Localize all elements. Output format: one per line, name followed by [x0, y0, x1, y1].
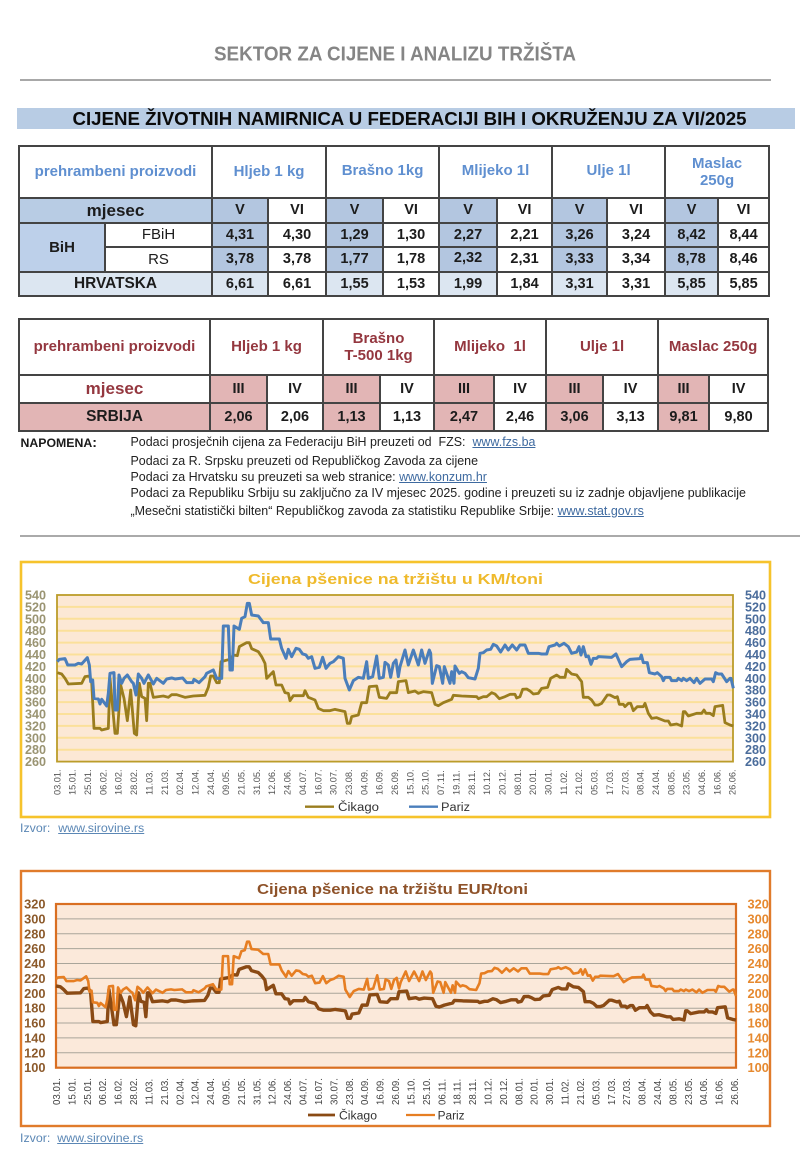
notes text: Podaci prosječnih cijena za Federaciju BiH preuzeti od FZS: www.fzs.ba	[130, 435, 535, 449]
x axis date labels: 15.10.	[405, 769, 415, 795]
x axis date labels: 11.03.	[144, 770, 154, 795]
x axis date labels: 06.02.	[98, 1078, 109, 1105]
x axis date labels	[52, 1078, 741, 1105]
left axis labels: 480	[25, 624, 46, 638]
left axis labels: 280	[25, 743, 46, 757]
table header row: products: Ulje 1l	[586, 162, 631, 179]
table header row: products	[20, 330, 757, 430]
x axis date labels: 11.03.	[144, 1079, 156, 1105]
x axis date labels: 24.04.	[206, 1078, 217, 1105]
table row: Serbia prices: 3,06	[560, 409, 589, 425]
notes text: Podaci za R. Srpsku preuzeti od Republičkog Zavoda za cijene	[130, 454, 478, 468]
right axis labels: 120	[748, 1045, 769, 1060]
left axis labels: 380	[25, 684, 46, 698]
table header row: products: Mlijeko 1l	[462, 162, 529, 179]
x axis date labels: 23.08.	[345, 1078, 356, 1105]
x axis date labels: 27.03.	[622, 1078, 633, 1105]
left axis labels: 140	[24, 1030, 46, 1045]
table row: months	[20, 199, 750, 222]
table row: RS prices: RS	[148, 251, 169, 268]
left axis labels: 520	[25, 600, 46, 614]
table row: months: IV	[732, 381, 745, 397]
table row: months: V	[235, 202, 245, 218]
table row: Croatia prices: 1,53	[397, 276, 425, 292]
x axis date labels: 10.12.	[482, 769, 492, 795]
table: BiH and Croatia food prices	[18, 145, 770, 297]
table row: FBiH prices: 8,42	[677, 227, 706, 243]
x axis date labels: 12.06.	[268, 1078, 279, 1105]
x axis date labels: 16.02.	[114, 1078, 125, 1105]
x axis date labels: 24.06.	[283, 769, 293, 795]
x axis date labels: 30.01.	[544, 769, 554, 795]
table header row: products	[20, 155, 758, 295]
table row: months: IV	[288, 381, 302, 397]
x axis date labels: 15.01.	[67, 1078, 78, 1105]
x axis date labels: 21.02.	[574, 769, 584, 795]
x axis date labels: 26.06.	[730, 1078, 741, 1105]
table row: Serbia prices: 2,06	[224, 409, 253, 425]
x axis date labels: 20.01.	[528, 769, 538, 795]
x axis date labels: 12.04.	[190, 769, 200, 795]
left axis labels: 260	[24, 941, 46, 956]
x axis date labels: 27.03.	[620, 769, 630, 795]
left axis labels: 300	[25, 731, 46, 745]
x axis date labels: 16.07.	[314, 1078, 325, 1105]
right axis labels: 100	[748, 1060, 769, 1075]
x axis date labels: 08.01.	[514, 1078, 525, 1105]
table row: months: IV	[513, 381, 527, 397]
table row: months: mjesec	[86, 379, 143, 398]
x axis date labels: 06.11.	[437, 1079, 448, 1105]
table row: Serbia prices	[20, 404, 753, 430]
x axis date labels: 23.08.	[344, 769, 354, 795]
x axis date labels: 23.05.	[682, 769, 692, 795]
x axis date labels: 28.02.	[129, 1078, 140, 1105]
line: Chicago	[56, 967, 736, 1026]
legend	[308, 1109, 465, 1122]
left axis labels: 260	[25, 755, 46, 769]
table header row: products: T-500 1kg	[344, 347, 413, 364]
banner: main title: CIJENE ŽIVOTNIH NAMIRNICA U FEDERACIJI BIH I OKRUŽENJU ZA VI/2025	[72, 108, 746, 129]
left axis labels: 420	[25, 660, 46, 674]
right axis labels: 520	[745, 600, 766, 614]
table row: months: VI	[737, 202, 750, 218]
left axis labels: 180	[24, 1001, 46, 1016]
x axis date labels: 25.10.	[422, 1078, 433, 1105]
table row: months: IV	[624, 381, 637, 397]
right axis labels: 240	[748, 956, 769, 971]
left axis labels: 320	[25, 719, 46, 733]
table row: RS prices: 8,46	[729, 251, 758, 267]
x axis date labels: 21.05.	[237, 1078, 248, 1105]
x axis date labels: 08.05.	[668, 1078, 679, 1105]
right axis labels: 360	[745, 696, 766, 710]
x axis date labels: 25.01.	[83, 769, 93, 795]
notes text: Podaci za Republiku Srbiju su zaključno za IV mjesec 2025. godine i preuzeti su iz zadnje objavljene publikacije	[130, 486, 746, 500]
x axis date labels: 05.03.	[590, 769, 600, 795]
table header row: products: Hljeb 1 kg	[234, 163, 304, 180]
x axis date labels: 08.01.	[513, 769, 523, 795]
x axis date labels: 25.01.	[83, 1078, 94, 1105]
x axis date labels: 03.01.	[52, 1078, 63, 1105]
table row: Croatia prices	[20, 273, 758, 295]
x axis date labels: 11.02.	[559, 770, 569, 795]
source: chart 1: Izvor: www.sirovine.rs	[20, 821, 144, 835]
table row: months: V	[687, 202, 696, 218]
table row: RS prices: 1,77	[340, 251, 369, 267]
x axis date labels: 04.07.	[298, 769, 308, 795]
x axis date labels: 16.09.	[376, 1078, 387, 1105]
x axis date labels: 10.12.	[484, 1078, 494, 1105]
table row: RS prices: 3,34	[622, 251, 650, 267]
legend	[305, 801, 470, 814]
table row: RS prices: 3,78	[226, 251, 254, 267]
x axis date labels: 21.02.	[576, 1078, 587, 1105]
table row: Croatia prices: 1,84	[510, 276, 539, 292]
table row: months: VI	[290, 202, 304, 218]
table row: months: III	[568, 381, 581, 397]
x axis date labels: 28.11.	[468, 1079, 479, 1105]
line: Chicago	[57, 643, 733, 735]
table row: Serbia prices: 1,13	[393, 409, 421, 425]
notes text: Podaci za Hrvatsku su preuzeti sa web stranice: www.konzum.hr	[130, 470, 487, 484]
right axis labels: 440	[745, 648, 766, 662]
table row: RS prices: 2,31	[510, 251, 539, 267]
legend: Pariz	[438, 1110, 465, 1122]
left axis labels: 300	[24, 911, 46, 926]
right axis labels: 180	[748, 1001, 769, 1016]
table row: months: V	[463, 202, 473, 218]
table row: months: III	[345, 381, 358, 397]
table row: FBiH prices: 2,27	[454, 227, 482, 243]
right axis labels: 280	[748, 926, 769, 941]
panel: wheat price chart in KM per ton	[20, 560, 772, 818]
line: Paris	[57, 603, 733, 710]
plot area	[57, 595, 733, 762]
table row: FBiH prices: 4,31	[226, 227, 254, 243]
table header row: products: Brašno 1kg	[342, 162, 423, 179]
chart title: Cijena pšenice na tržištu EUR/toni	[257, 882, 528, 898]
right axis labels: 460	[745, 636, 766, 650]
table row: FBiH prices: 3,24	[622, 227, 650, 243]
x axis date labels: 16.09.	[375, 769, 385, 795]
right axis labels: 540	[745, 588, 766, 602]
left axis labels: 360	[25, 696, 46, 710]
x axis date labels: 17.03.	[605, 769, 615, 795]
left axis labels: 320	[24, 896, 46, 912]
table row: Serbia prices: SRBIJA	[86, 408, 143, 425]
x axis date labels: 24.04.	[653, 1078, 664, 1105]
table row: Serbia prices: 2,06	[281, 409, 309, 425]
x axis date labels: 16.06.	[712, 769, 722, 795]
table row: Croatia prices: 5,85	[677, 276, 706, 292]
x axis date labels: 16.07.	[313, 769, 323, 795]
table header row: products: prehrambeni proizvodi	[34, 338, 195, 355]
table row: Croatia prices: 1,99	[454, 276, 482, 292]
x axis date labels: 20.01.	[530, 1078, 541, 1105]
right axis labels: 480	[745, 624, 766, 638]
table row: Serbia prices: 9,81	[669, 409, 698, 425]
table row: months: VI	[629, 202, 643, 218]
table row: months: VI	[518, 202, 531, 218]
right axis labels: 300	[745, 731, 766, 745]
right axis labels: 300	[748, 911, 769, 926]
table header row: products: 250g	[700, 172, 734, 189]
notes label: NAPOMENA:	[20, 434, 97, 450]
chart title: Cijena pšenice na tržištu u KM/toni	[248, 572, 543, 588]
left axis labels: 240	[24, 956, 46, 971]
right axis labels: 340	[745, 708, 766, 722]
right axis labels	[748, 896, 769, 1075]
left axis labels: 160	[24, 1016, 46, 1030]
left axis labels: 460	[25, 636, 46, 650]
x axis date labels: 07.11.	[436, 770, 446, 795]
header: sector title: SEKTOR ZA CIJENE I ANALIZU TRŽIŠTA	[214, 42, 576, 66]
x axis date labels: 19.11.	[451, 770, 461, 795]
table header row: products: Hljeb 1 kg	[231, 338, 302, 355]
x axis date labels: 24.04.	[651, 769, 661, 795]
table row: RS prices: 8,78	[677, 251, 706, 267]
right axis labels: 320	[748, 896, 769, 912]
x axis date labels: 08.05.	[666, 769, 676, 795]
table row: FBiH prices: 1,30	[397, 227, 425, 243]
plot area	[56, 904, 736, 1068]
right axis labels: 380	[745, 684, 766, 698]
x axis date labels: 15.10.	[406, 1078, 417, 1105]
table header row: products: Brašno	[353, 330, 404, 347]
table row: Croatia prices: 6,61	[226, 276, 254, 292]
left axis labels: 440	[25, 648, 46, 662]
table header row: products: Maslac 250g	[669, 338, 757, 355]
left axis labels	[24, 896, 46, 1075]
table row: Serbia prices: 2,46	[506, 409, 534, 425]
right axis labels: 260	[748, 941, 769, 956]
x axis date labels: 26.09.	[390, 769, 400, 795]
x axis date labels: 04.09.	[360, 1078, 371, 1105]
table row: RS prices: 1,78	[397, 251, 425, 267]
x axis date labels: 04.07.	[299, 1078, 310, 1105]
table header row: products: Maslac	[692, 155, 742, 172]
x axis date labels: 09.05.	[221, 769, 231, 795]
x axis date labels: 04.06.	[697, 769, 707, 795]
x axis date labels	[52, 769, 738, 795]
x axis date labels: 24.04.	[206, 769, 216, 795]
x axis date labels: 16.06.	[715, 1078, 726, 1105]
x axis date labels: 02.04.	[175, 769, 185, 795]
table row: Croatia prices: 5,85	[729, 276, 758, 292]
table row: FBiH prices: 1,29	[340, 227, 369, 243]
right axis labels: 160	[748, 1016, 769, 1030]
table row: months: mjesec	[87, 201, 144, 220]
right axis labels: 140	[748, 1030, 769, 1045]
x axis date labels: 04.09.	[359, 769, 369, 795]
x axis date labels: 12.06.	[267, 769, 277, 795]
x axis date labels: 23.05.	[684, 1078, 695, 1105]
x axis date labels: 26.09.	[391, 1078, 402, 1105]
x axis date labels: 02.04.	[175, 1078, 186, 1105]
left axis labels: 540	[25, 588, 46, 602]
x axis date labels: 05.03.	[591, 1078, 602, 1105]
right axis labels	[745, 588, 766, 769]
x axis date labels: 18.11.	[453, 1079, 464, 1105]
right axis labels: 500	[745, 612, 766, 626]
notes text	[130, 435, 746, 518]
table row: RS prices: 3,33	[565, 251, 594, 267]
table row: FBiH prices: FBiH	[142, 226, 175, 243]
x axis date labels: 31.05.	[252, 769, 262, 795]
table row: Croatia prices: 6,61	[283, 276, 311, 292]
table row: RS prices: 2,32	[454, 250, 482, 266]
table row: Serbia prices: 2,47	[450, 409, 478, 425]
x axis date labels: 11.02.	[560, 1079, 572, 1105]
x axis date labels: 08.04.	[638, 1078, 649, 1105]
source: chart 2: Izvor: www.sirovine.rs	[20, 1130, 143, 1144]
x axis date labels: 17.03.	[607, 1078, 618, 1105]
right axis labels: 220	[748, 971, 769, 986]
x axis date labels: 31.05.	[252, 1078, 263, 1105]
left axis labels: 120	[24, 1045, 46, 1060]
table header row: products: Ulje 1l	[580, 338, 624, 355]
x axis date labels: 15.01.	[68, 769, 78, 795]
x axis date labels: 26.06.	[728, 769, 738, 795]
table row: RS prices: 3,78	[283, 251, 311, 267]
table row: months	[86, 376, 746, 402]
table row: months: III	[232, 381, 245, 397]
table header row: products: Mlijeko 1l	[454, 338, 526, 355]
left axis labels: 280	[24, 926, 46, 941]
x axis date labels: 21.03.	[160, 1078, 171, 1105]
table row: Serbia prices: 1,13	[337, 409, 366, 425]
table row: Croatia prices: HRVATSKA	[74, 275, 157, 292]
table: Serbia food prices	[18, 318, 769, 432]
right axis labels: 260	[745, 755, 766, 769]
right axis labels: 200	[748, 986, 769, 1001]
table row: FBiH prices	[20, 224, 758, 271]
left axis labels	[25, 588, 46, 769]
legend: Čikago	[339, 1109, 377, 1122]
table row: Serbia prices: 9,80	[724, 409, 753, 425]
line: Paris	[56, 942, 736, 1010]
x axis date labels: 06.02.	[98, 769, 108, 795]
x axis date labels: 25.10.	[421, 769, 431, 795]
table row: months: III	[458, 381, 470, 397]
x axis date labels: 04.06.	[699, 1078, 710, 1105]
table row: RS prices	[148, 248, 758, 271]
x axis date labels: 30.07.	[329, 769, 339, 795]
right axis labels: 400	[745, 672, 766, 686]
table row: Serbia prices: 3,13	[616, 409, 645, 425]
table row: months: V	[350, 202, 359, 218]
table row: months: V	[575, 202, 584, 218]
table row: Croatia prices: 3,31	[565, 276, 594, 292]
x axis date labels: 16.02.	[114, 769, 124, 795]
table row: FBiH prices: 2,21	[510, 227, 539, 243]
left axis labels: 200	[24, 986, 46, 1001]
x axis date labels: 24.06.	[283, 1078, 294, 1105]
x axis date labels: 08.04.	[636, 769, 646, 795]
x axis date labels: 28.02.	[129, 769, 139, 795]
left axis labels: 500	[25, 612, 46, 626]
x axis date labels: 30.01.	[545, 1078, 556, 1105]
x axis date labels: 30.07.	[329, 1078, 340, 1105]
table row: FBiH prices: 4,30	[283, 227, 311, 243]
left axis labels: 400	[25, 672, 46, 686]
right axis labels: 280	[745, 743, 766, 757]
table header row: products: prehrambeni proizvodi	[35, 163, 196, 180]
table row: months: VI	[404, 202, 418, 218]
x axis date labels: 20.12.	[499, 1078, 510, 1105]
table row: Croatia prices: 3,31	[622, 276, 650, 292]
left axis labels: 100	[24, 1060, 46, 1075]
x axis date labels: 09.05.	[222, 1078, 232, 1105]
x axis date labels: 21.03.	[160, 769, 170, 795]
table row: months: IV	[400, 381, 414, 397]
table header row: products: BiH	[49, 239, 75, 256]
x axis date labels: 21.05.	[236, 769, 246, 795]
legend: Čikago	[338, 801, 379, 814]
left axis labels: 220	[24, 971, 46, 986]
table row: FBiH prices: 3,26	[565, 227, 594, 243]
right axis labels: 420	[745, 660, 766, 674]
x axis date labels: 03.01.	[52, 769, 62, 795]
x axis date labels: 12.04.	[191, 1078, 202, 1105]
notes text: „Mesečni statistički bilten“ Republičkog zavoda za statistiku Republike Srbije: www.stat.gov.rs	[130, 504, 644, 518]
x axis date labels: 20.12.	[498, 769, 508, 795]
left axis labels: 340	[25, 708, 46, 722]
right axis labels: 320	[745, 719, 766, 733]
table row: FBiH prices: 8,44	[729, 227, 758, 243]
x axis date labels: 28.11.	[467, 770, 477, 795]
table row: Croatia prices: 1,55	[340, 276, 369, 292]
table row: months: III	[677, 381, 690, 397]
legend: Pariz	[441, 802, 470, 814]
